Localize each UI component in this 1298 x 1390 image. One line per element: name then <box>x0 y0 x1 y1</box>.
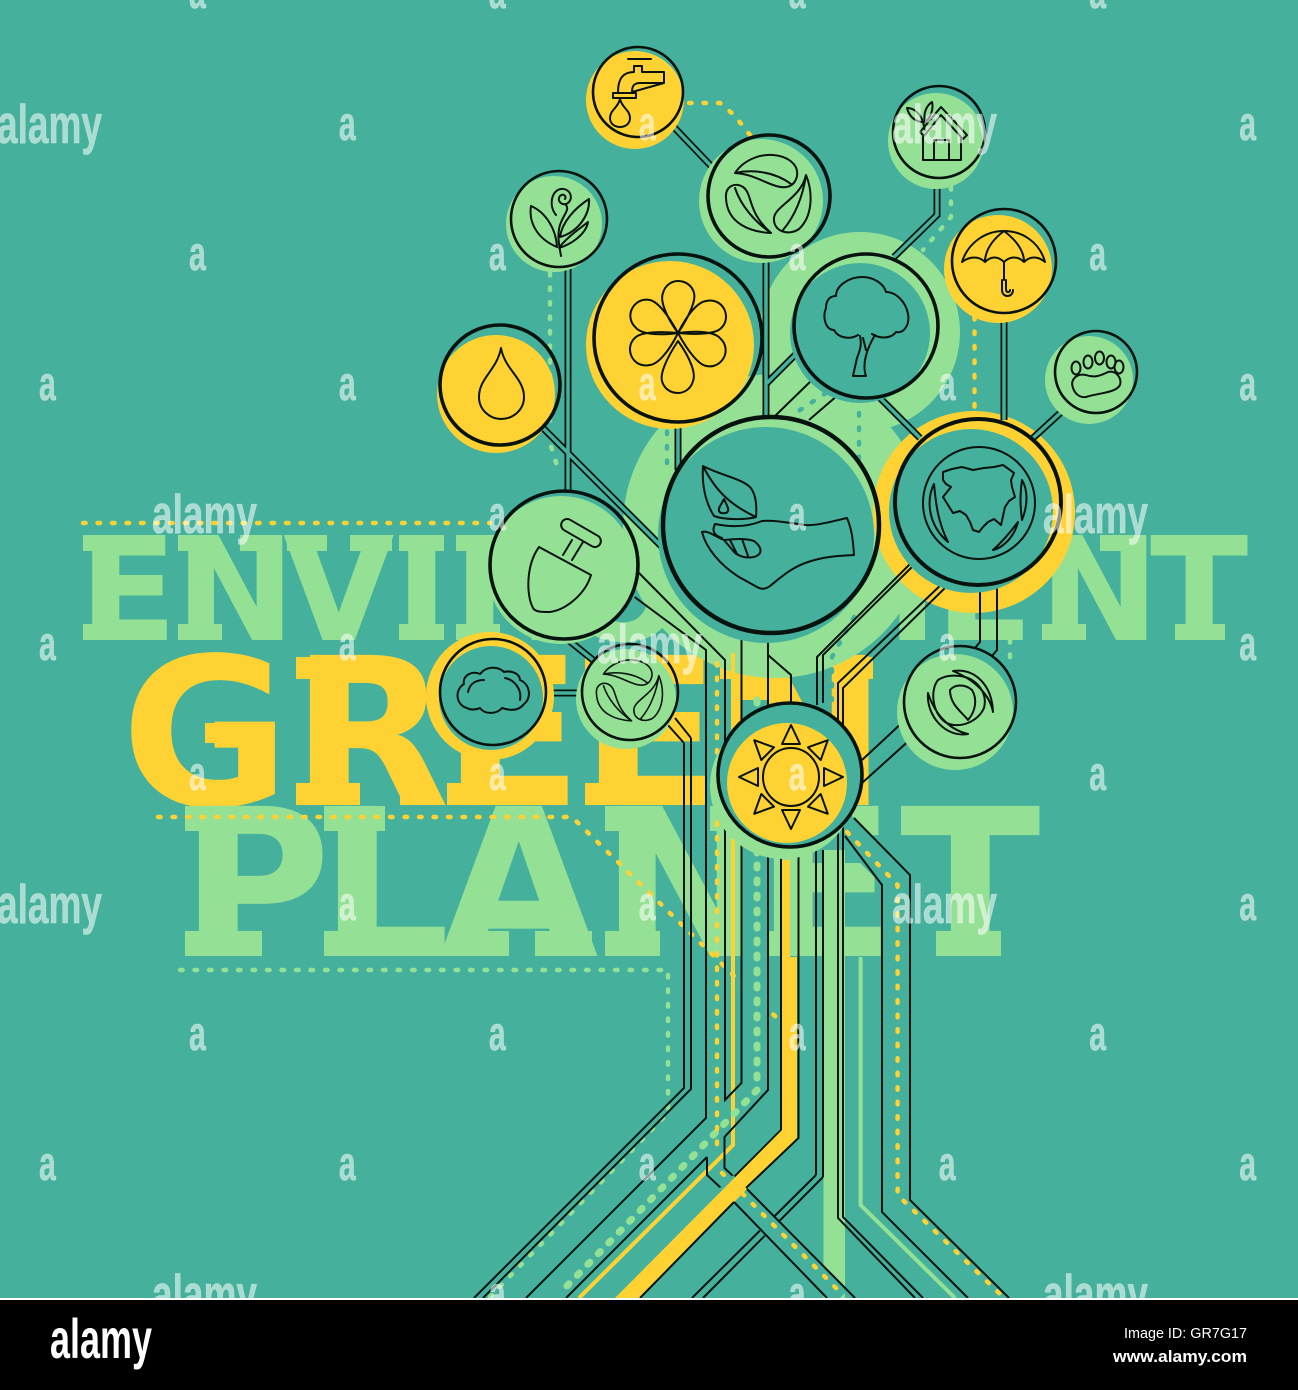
yellow halo: globe circle <box>873 411 1075 613</box>
dots on pale halo <box>667 393 859 700</box>
icon: tree <box>824 277 908 376</box>
icon: house with leaves <box>907 102 967 160</box>
watermarks: aa <box>489 488 806 541</box>
icon: fern sprig <box>531 189 589 256</box>
trunk: crossing band <box>726 1182 840 1298</box>
circle: shovel <box>487 491 638 644</box>
icon: drop <box>479 348 524 419</box>
icon: Asia globe <box>923 447 1035 559</box>
footer url: www.alamy.com <box>1112 1347 1247 1366</box>
watermarks: aaaaa <box>39 358 1257 411</box>
heading: PLANET: PLANET <box>180 765 1041 1005</box>
watermarks: aa <box>489 1268 806 1321</box>
trunk: yellow thin stripe <box>579 653 733 1298</box>
circle: paw <box>1045 331 1137 424</box>
icon: three leaves <box>726 155 811 233</box>
pale halo: hand circle <box>623 374 927 678</box>
trunk: pale dots <box>563 700 757 1290</box>
watermarks: alamy <box>1043 483 1148 545</box>
icon: cloud <box>458 668 529 713</box>
footer image id: Image ID: GR7G17 <box>1124 1325 1247 1342</box>
trunk: thick yellow stripe <box>615 860 797 1298</box>
circle: fern <box>506 171 607 272</box>
circle: cloud <box>426 632 554 760</box>
circle: earth with swooshes <box>897 646 1016 770</box>
icon: umbrella <box>962 231 1045 296</box>
trunk: black lines <box>474 573 1009 1298</box>
watermarks: alamy <box>892 873 997 935</box>
circle: water drop <box>437 325 560 453</box>
watermarks: alamy <box>597 613 702 675</box>
circle: tap icon <box>586 47 684 149</box>
icon: sun <box>739 725 843 829</box>
heading: ENVIRONMENT: ENVIRONMENT <box>79 506 1248 674</box>
icon: shovel <box>528 517 603 612</box>
watermarks: aaaa <box>189 228 1107 281</box>
icon: water tap <box>610 59 664 127</box>
circle: hand holding leaf <box>658 417 879 643</box>
watermarks: alamy <box>892 93 997 155</box>
footer bar <box>0 1298 1298 1390</box>
watermarks: aaaa <box>189 1008 1107 1061</box>
icon: bear paw <box>1072 352 1124 397</box>
circle: small leaves <box>576 644 678 749</box>
watermarks: alamy <box>152 483 257 545</box>
watermarks: alamy <box>0 93 102 155</box>
icon: flower petals <box>624 281 732 393</box>
watermarks: aaaaa <box>39 1138 1257 1191</box>
circle: flower <box>586 254 762 429</box>
watermarks: aaaa <box>189 748 1107 801</box>
trunk: yellow dots <box>717 663 1003 1297</box>
icon: hand with leaf <box>702 466 854 589</box>
circle: sun <box>710 703 862 859</box>
watermarks: aaaa <box>39 618 1257 671</box>
circle: globe <box>889 419 1061 593</box>
dotted guide lines <box>83 103 1010 1297</box>
footer logo: alamy <box>50 1307 152 1370</box>
circle: tree <box>790 254 938 403</box>
watermarks: aaa <box>339 878 1257 931</box>
circle: umbrella <box>944 209 1056 323</box>
watermarks: alamy <box>0 873 102 935</box>
icon: earth <box>928 671 993 734</box>
watermarks: aaa <box>339 98 1257 151</box>
connectors between circles <box>543 123 1069 783</box>
circle: recycle leaves <box>699 135 830 263</box>
circle: house icon <box>888 86 985 189</box>
tree trunk <box>474 573 1009 1298</box>
trunk: pale wide stripe <box>824 850 845 1298</box>
watermarks: alamy <box>1043 1263 1148 1325</box>
trunk: pale thin stripe <box>861 957 955 1298</box>
trunk: teal bands <box>549 700 995 1298</box>
heading: GREEN: GREEN <box>121 614 887 854</box>
pale halo: tree circle <box>760 232 960 432</box>
watermarks: alamy <box>152 1263 257 1325</box>
icon: small three leaves <box>596 660 662 721</box>
